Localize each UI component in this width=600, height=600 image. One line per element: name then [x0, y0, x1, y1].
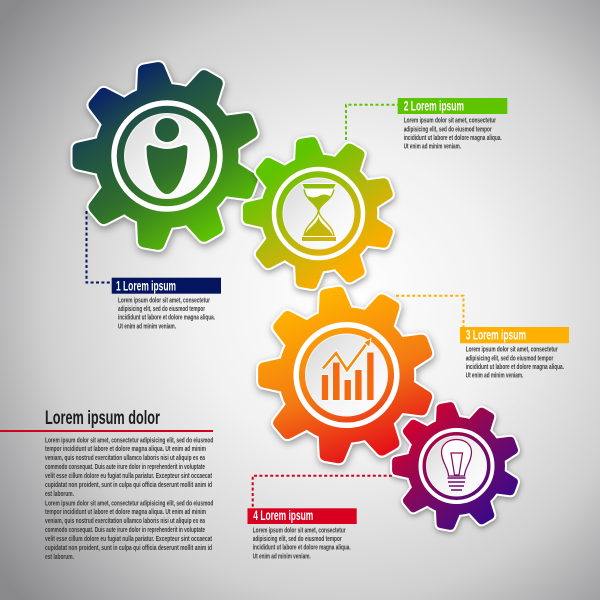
- main text block: est laborum.: [45, 554, 74, 561]
- connector: step 4: [253, 476, 392, 508]
- label 2 text: Lorem ipsum dolor sit amet, consectetur: [404, 118, 496, 125]
- label 1 text: adipisicing elit, sed do eiusmod tempor: [118, 306, 205, 313]
- gear 2: hourglass: [240, 134, 398, 292]
- label 1 text: Ut enim ad minim veniam.: [118, 323, 176, 330]
- connector: step 2: [346, 105, 398, 140]
- label 2 text: adipisicing elit, sed do eiusmod tempor: [404, 126, 492, 133]
- label 3: [460, 327, 569, 380]
- label 2: [398, 98, 507, 151]
- main text block: veniam, quis nostrud exercitation ullamco laboris nisi ut aliquip ex ea: [45, 518, 205, 525]
- label 4: [248, 508, 357, 560]
- connector: step 3: [396, 296, 464, 327]
- main text block: Lorem ipsum dolor sit amet, consectetur adipisicing elit, sed do eiusmod: [45, 437, 213, 444]
- label 2 text: Ut enim ad minim veniam.: [404, 144, 461, 151]
- main text block: [45, 437, 213, 561]
- main text block: commodo consequat. Duis aute irure dolor in reprehenderit in voluptate: [45, 464, 205, 471]
- gear 1: person: [68, 58, 265, 254]
- label 1: [112, 278, 221, 330]
- main text block: Lorem ipsum dolor sit amet, consectetur adipisicing elit, sed do eiusmod: [45, 500, 213, 507]
- label 1 text: Lorem ipsum dolor sit amet, consectetur: [118, 297, 210, 304]
- label 4 text: [253, 527, 351, 560]
- main text block: est laborum.: [45, 491, 74, 498]
- main text block: cupidatat non proident, sunt in culpa qui officia deserunt mollit anim id: [45, 545, 212, 552]
- label 1 text: [118, 297, 215, 330]
- label 4 text: Ut enim ad minim veniam.: [253, 553, 311, 560]
- main text block: tempor incididunt ut labore et dolore magna aliqua. Ut enim ad minim: [45, 509, 206, 516]
- main text block: tempor incididunt ut labore et dolore magna aliqua. Ut enim ad minim: [45, 446, 206, 453]
- gear 4: light bulb: [390, 400, 522, 532]
- label 3 text: Ut enim ad minim veniam.: [466, 373, 523, 380]
- main text block: velit esse cillum dolore eu fugiat nulla pariatur. Excepteur sint occaecat: [45, 473, 212, 480]
- icon: bar chart with arrow: [322, 338, 374, 400]
- label 2 text: [404, 118, 502, 151]
- icon: hourglass: [302, 184, 336, 242]
- main text block: cupidatat non proident, sunt in culpa qui officia deserunt mollit anim id: [45, 482, 212, 489]
- heading: Lorem ipsum dolor: [45, 408, 160, 429]
- label 2 text: incididunt ut labore et dolore magna aliqua.: [404, 135, 502, 142]
- main text block: veniam, quis nostrud exercitation ullamco laboris nisi ut aliquip ex ea: [45, 455, 205, 462]
- label 4: 4 Lorem ipsum: [253, 508, 313, 523]
- label 2: 2 Lorem ipsum: [404, 99, 464, 114]
- label 4 text: Lorem ipsum dolor sit amet, consectetur: [253, 527, 346, 534]
- label 1: 1 Lorem ipsum: [116, 279, 176, 294]
- label 3: 3 Lorem ipsum: [466, 327, 526, 342]
- heading rule: [0, 430, 213, 432]
- label 3 text: [466, 347, 564, 380]
- main text block: commodo consequat. Duis aute irure dolor in reprehenderit in voluptate: [45, 527, 205, 534]
- label 4 text: adipisicing elit, sed do eiusmod tempor: [253, 536, 342, 543]
- connector: step 1: [86, 211, 111, 282]
- icon: light bulb: [442, 440, 472, 490]
- icon: person: [146, 117, 188, 195]
- label 4 text: incididunt ut labore et dolore magna aliqua.: [253, 545, 351, 552]
- label 1 text: incididunt ut labore et dolore magna aliqua.: [118, 315, 215, 322]
- main text block: velit esse cillum dolore eu fugiat nulla pariatur. Excepteur sint occaecat: [45, 536, 212, 543]
- label 3 text: adipisicing elit, sed do eiusmod tempor: [466, 355, 553, 362]
- label 3 text: Lorem ipsum dolor sit amet, consectetur: [466, 347, 558, 354]
- gear 3: chart: [256, 285, 437, 465]
